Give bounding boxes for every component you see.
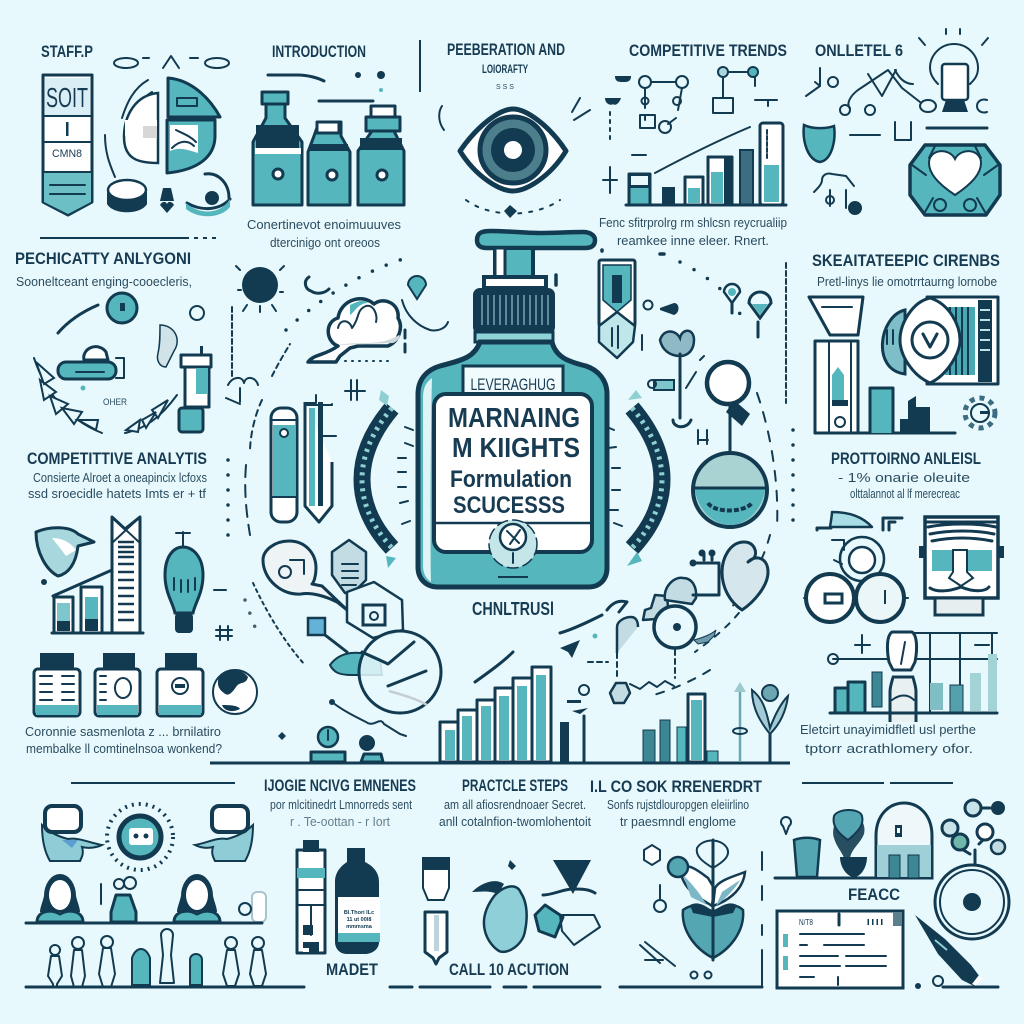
bottle body (418, 342, 607, 587)
text: competitive trends: Fenc sfitrprolrg rm shlcsn reycrualiip (599, 216, 787, 230)
text: emerging: por mlcitinedrt Lmnorreds sent (270, 798, 412, 812)
panel: top right (804, 29, 1000, 215)
illustration: central ring (226, 231, 793, 762)
panel: bottom left (26, 777, 416, 987)
text: bottom right (607, 798, 749, 829)
label tab: LEVERAGHUG (470, 375, 556, 394)
icon: form card: N/T8 (799, 918, 813, 927)
icon: squiggle and people (278, 699, 406, 762)
heading: online: ONLLETEL 6 (815, 42, 903, 60)
text: proportion: olttalannot al lf merecreac (850, 487, 960, 501)
title: label text: Formulation (450, 466, 572, 493)
heading: perception: PEEBERATION AND (447, 41, 565, 59)
title: label text: MARNAING (448, 402, 580, 433)
icon: jars row (34, 653, 257, 716)
panel: lower right chart (800, 632, 997, 756)
icon: top accents (114, 56, 229, 68)
chart: central bars (440, 652, 788, 762)
heading: strategic: SKEAITATEEPIC CIRENBS (812, 252, 1000, 270)
text: lower right (800, 723, 976, 756)
panel: bottom right illustrations (775, 800, 1009, 989)
title: label text: SCUCESSS (453, 492, 565, 519)
icon: right gauge (607, 390, 662, 566)
icon: bulb (165, 532, 232, 640)
icon: form card (777, 911, 903, 988)
text: competitive trends (599, 216, 787, 248)
bottle highlight (423, 378, 432, 582)
icon: three bottles (253, 71, 404, 205)
text: consumer: Coronnie sasmenlota z ... brnilatiro (25, 725, 221, 739)
icon: brush and leaf shapes (423, 844, 600, 964)
text: strategic: Pretl-linys lie omotrrtaurng lornobe (817, 275, 997, 289)
heading: perception: LOIORAFTY (482, 62, 528, 76)
panel: market (297, 840, 380, 979)
icon: machine (809, 297, 998, 433)
panel: pechicatty analysis (15, 250, 211, 433)
heading: startup: STAFF.P (41, 43, 93, 61)
icon: figure silhouettes (48, 929, 266, 987)
text: practical steps: anll cotalnfion-twomlohentoit (439, 815, 592, 829)
caption: central: CHNLTRUSl (472, 599, 554, 619)
icon: left gauge (362, 390, 413, 568)
icon: form card: IIII (866, 918, 884, 927)
icon: pin (402, 276, 448, 352)
text: introduction: dtercinigo ont oreoos (270, 236, 380, 250)
heading: emerging: IJOGIE NCIVG EMNENES (264, 777, 416, 795)
icon: bottom tokens (107, 174, 230, 216)
icon: people row (37, 874, 266, 922)
text: proportion: - 1% onarie oleuite (838, 471, 970, 485)
chart: bottom strip (815, 388, 995, 433)
icon: two bottles (297, 840, 380, 954)
heading: practical steps: PRACTCLE STEPS (462, 777, 568, 795)
text: practical steps (439, 798, 592, 829)
heading: feedback: FEACC (848, 886, 900, 904)
icon: pins and plant (644, 284, 771, 427)
icon: two bottles: 11 ut 00l8 (347, 917, 371, 923)
text: emerging (270, 798, 412, 829)
panel: competitive trends (599, 42, 787, 248)
icon: laurel wreath: OHER (103, 397, 127, 407)
text: bottom right: tr paesmndl englome (620, 815, 736, 829)
heading: market: MADET (326, 961, 378, 979)
text: practical steps: am all afiosrendnoaer Secret. (444, 798, 586, 812)
chart: bars (603, 123, 786, 205)
text: proportion (838, 471, 970, 501)
panel: skeatlateepic circles (809, 252, 1000, 433)
chart: trend network (605, 67, 777, 140)
icon: connectors (806, 68, 920, 214)
icon: teal bowl (804, 125, 834, 162)
text: consumer (25, 725, 222, 756)
chart: rising bars (36, 517, 143, 633)
panel: competitive analysis (25, 450, 257, 756)
text: analysis: Sooneltceant enging-cooecleris, (16, 275, 192, 289)
panel: proportion analysis (804, 450, 1004, 622)
icon: hexagon (308, 582, 403, 652)
icon: document shape (332, 540, 366, 593)
chart: lines and bars (828, 632, 997, 722)
heading: call to action: CALL 10 ACUTION (449, 961, 569, 979)
icon: ring dots (226, 250, 793, 696)
icon: heart emblem (910, 145, 1000, 215)
panel: startup (41, 43, 230, 216)
text: lower right: Eletcirt unayimidfletl usl perthe (800, 723, 976, 737)
text: competitive trends: reamkee inne eleer. Rnert. (617, 234, 769, 248)
icon: vases and dome (775, 803, 932, 878)
icon: pen (915, 915, 998, 989)
icon: test tubes (271, 380, 365, 522)
label tab (463, 366, 563, 394)
icon: masks and gear (42, 804, 253, 870)
title: label text (448, 402, 580, 519)
icon: robot face (919, 517, 1004, 615)
icon: two bottles: mmmsma (346, 924, 373, 930)
text: emerging: r . Te-oottan - r Iort (290, 815, 391, 829)
text: consumer: membalke ll comtinelnsoa wonkend? (26, 742, 222, 756)
pump (473, 231, 595, 342)
panel: perception (439, 41, 590, 218)
heading: analysis: PECHICATTY ANLYGONI (15, 250, 191, 268)
icon: cloud (308, 299, 400, 362)
label (434, 394, 592, 552)
icon: lightbulb (919, 29, 988, 128)
text: competitive analysis: ssd sroecidle hatets Imts er + tf (28, 487, 207, 501)
icon: speech bubble (263, 541, 347, 610)
icon: eye (439, 98, 590, 218)
icon: leaf and circle (330, 631, 441, 713)
panel: practical steps (390, 777, 600, 987)
heading: bottom right: I.L CO SOK RRENERDRT (590, 778, 762, 796)
heading: introduction: INTRODUCTION (272, 43, 366, 61)
text: introduction: Conertinevot enoimuuuves (247, 218, 401, 232)
icon: magnifier and flask (686, 356, 767, 527)
icon: glasses figure (804, 512, 908, 622)
text: lower right: tptorr acrathlomery ofor. (805, 742, 973, 756)
heading: competitive analysis: COMPETITTIVE ANALYTIS (27, 450, 207, 468)
icon: main bottle (418, 231, 607, 587)
panel: bottom right text (590, 778, 762, 987)
icon: seal (489, 520, 537, 578)
icon: segmented circle (105, 78, 220, 177)
text: competitive analysis (28, 471, 207, 501)
icon: molecule and disc (935, 800, 1009, 939)
icon: tag pendant (599, 260, 642, 358)
heading: proportion: PROTTOIRNO ANLEISL (831, 450, 981, 468)
heading: competitive trends: COMPETITIVE TRENDS (629, 42, 787, 60)
panel: introduction (247, 43, 404, 250)
text: introduction (247, 218, 401, 250)
text: competitive analysis: Consierte Alroet a oneapincix lcfoxs (33, 471, 207, 485)
heading: perception: S S S (496, 84, 514, 91)
text: bottom right: Sonfs rujstdlouropgen eleiirlino (607, 798, 749, 812)
title: label text: M KIIGHTS (452, 432, 580, 463)
icon: gears and molecule (560, 542, 768, 703)
icon: label strip: SOIT (46, 82, 88, 113)
icon: label strip (43, 75, 92, 215)
icon: leaf plant (620, 840, 762, 987)
icon: two bottles: Bl.Thori ILc (344, 910, 374, 916)
icon: laurel wreath (34, 293, 211, 433)
icon: crescent (305, 277, 329, 293)
heading: perception (447, 41, 565, 91)
icon: sun (236, 266, 284, 312)
icon: label strip: CMN8 (52, 148, 82, 160)
